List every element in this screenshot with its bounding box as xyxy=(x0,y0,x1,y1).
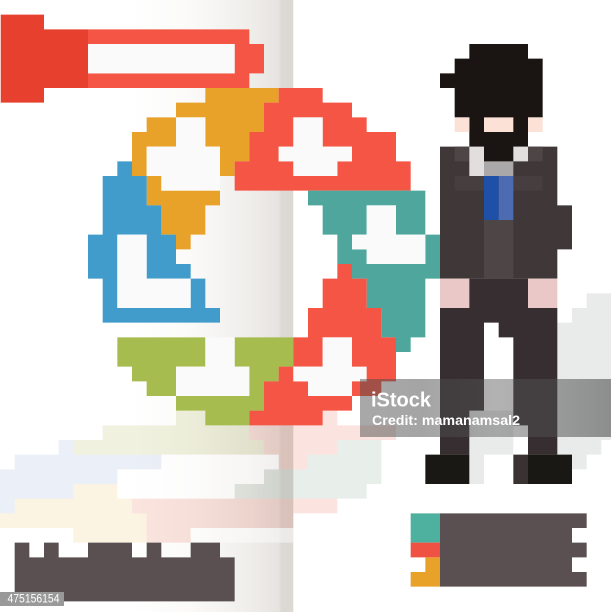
colour swatch: orange xyxy=(411,557,440,587)
shoes xyxy=(425,455,572,484)
ring segment: orange xyxy=(132,88,279,249)
face skin xyxy=(455,117,543,132)
ring segment: teal xyxy=(308,191,440,352)
hands xyxy=(440,279,557,308)
collar grey xyxy=(484,161,513,176)
jacket xyxy=(440,147,572,279)
faded shadow blocks xyxy=(0,293,611,543)
ring segment: lower red xyxy=(249,264,396,425)
watermark band xyxy=(360,379,611,437)
top banner: red bar xyxy=(1,15,264,103)
necktie xyxy=(484,176,513,220)
hair and beard xyxy=(440,44,543,161)
image id tag: 475156154 xyxy=(8,592,60,606)
shoe heel xyxy=(513,455,528,484)
ring segment: green xyxy=(117,337,293,425)
bottom-left dark panel xyxy=(15,543,235,601)
background gradient panel xyxy=(0,0,293,612)
watermark credit: Credit: mamanamsal2 xyxy=(372,412,520,428)
shirt collar xyxy=(469,147,528,176)
bottom-right dark panel xyxy=(440,513,587,587)
watermark logo: iStock xyxy=(371,390,432,412)
person figure xyxy=(425,44,572,484)
colour swatch: red xyxy=(411,543,440,557)
colour swatch: teal xyxy=(411,513,440,543)
ring segment: top red xyxy=(235,88,411,191)
ring segment: blue xyxy=(88,161,220,323)
trousers xyxy=(440,279,557,455)
